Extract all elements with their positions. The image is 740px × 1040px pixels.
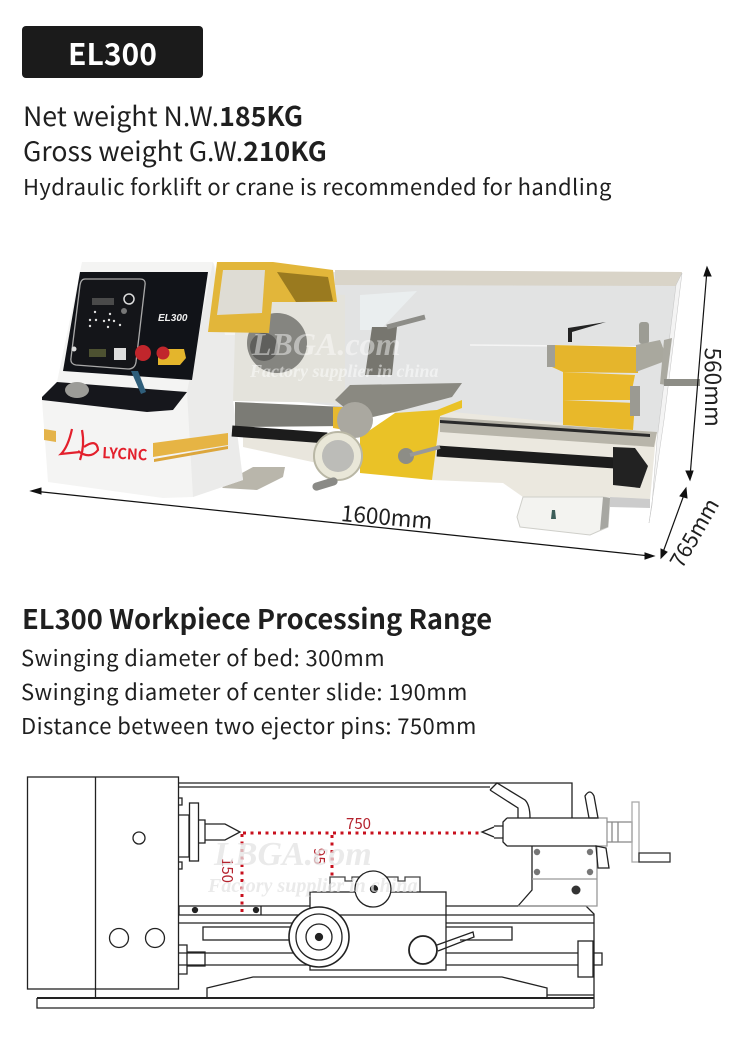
red dimension lines bbox=[242, 833, 480, 914]
rack bbox=[203, 927, 512, 940]
tailstock bbox=[547, 322, 700, 430]
weight text block bbox=[23, 95, 612, 202]
carriage bbox=[310, 871, 446, 970]
title badge bbox=[22, 26, 203, 78]
drawing watermark: LBGA.com bbox=[214, 836, 372, 873]
headstock side rail and leadscrew bbox=[232, 402, 345, 463]
weight text block: Hydraulic forklift or crane is recommended for handling bbox=[23, 170, 612, 202]
dimension label: 765mm: 765mm bbox=[661, 492, 726, 573]
drawing watermark tagline: Factory supplier in china bbox=[208, 875, 417, 897]
carriage and tool post bbox=[311, 291, 462, 492]
handwheels bbox=[289, 907, 474, 967]
dimension label: 1600mm: 1600mm bbox=[340, 496, 434, 536]
lathe bed bbox=[220, 410, 657, 535]
logo: LYCNC: LYCNC bbox=[102, 442, 148, 465]
left centre bbox=[179, 803, 240, 861]
processing range specs: Distance between two ejector pins: 750mm bbox=[21, 709, 477, 741]
dimension arrows bbox=[31, 267, 711, 559]
processing range specs: Swinging diameter of center slide: 190mm bbox=[21, 675, 468, 707]
red dimension labels: 750 bbox=[346, 813, 371, 834]
red dimension labels: 95 bbox=[309, 848, 330, 865]
processing range specs: Swinging diameter of bed: 300mm bbox=[21, 641, 385, 673]
headstock outline bbox=[28, 777, 178, 998]
weight text block: Gross weight G.W.210KG bbox=[23, 130, 327, 169]
yellow chuck guard bbox=[208, 262, 337, 333]
watermark: LBGA.com bbox=[252, 326, 400, 362]
weight text block: Net weight N.W.185KG bbox=[23, 95, 303, 134]
back splash panel bbox=[300, 270, 682, 523]
watermark tagline: Factory supplier in china bbox=[250, 361, 439, 381]
red dimension labels bbox=[217, 813, 371, 883]
logo: LYCNC bbox=[61, 429, 148, 465]
chuck bbox=[233, 290, 345, 403]
tailstock drawing bbox=[482, 783, 670, 906]
lathe machine photo illustration bbox=[30, 262, 712, 560]
headstock cabinet bbox=[42, 262, 245, 498]
feed bracket bbox=[578, 941, 602, 977]
dimension label: 560mm: 560mm bbox=[698, 348, 730, 427]
bed and guard lines bbox=[37, 783, 594, 1008]
model label: EL300 bbox=[158, 313, 188, 324]
title badge: EL300 bbox=[68, 30, 157, 74]
red dimension labels: 150 bbox=[217, 858, 238, 883]
processing range heading: EL300 Workpiece Processing Range bbox=[22, 597, 492, 637]
processing range specs bbox=[21, 641, 477, 741]
